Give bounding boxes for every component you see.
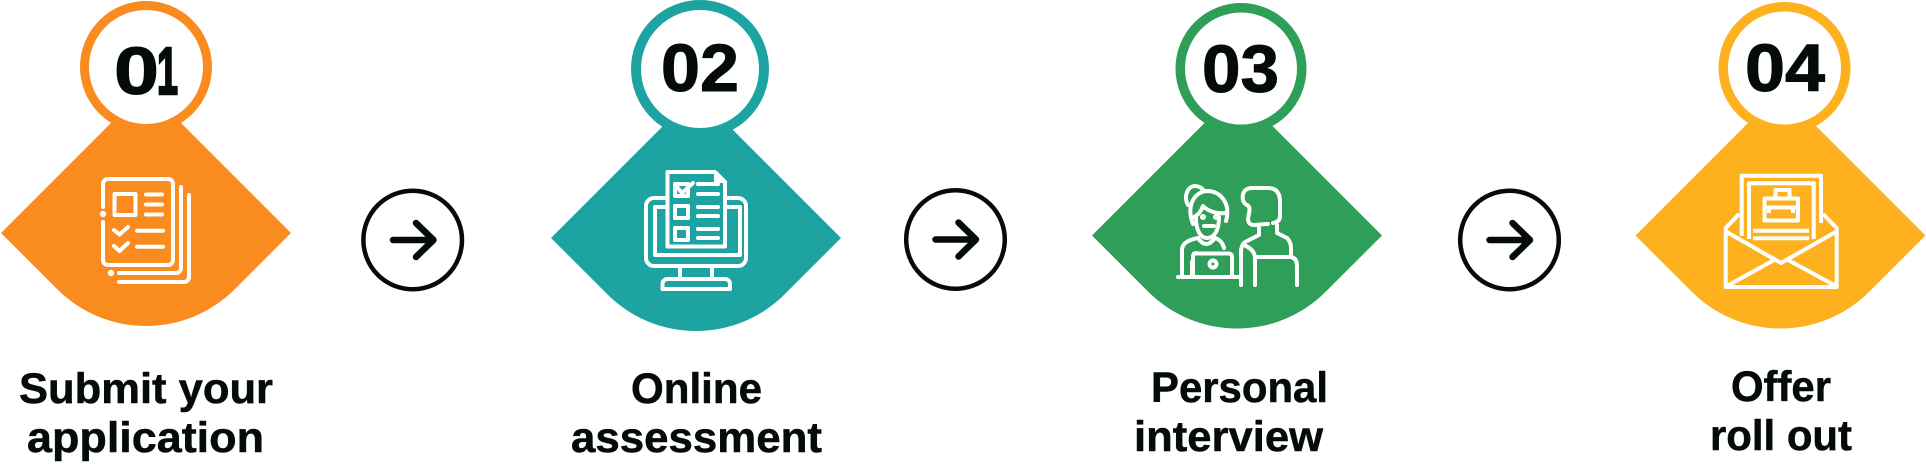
number badge 04 xyxy=(1723,7,1846,129)
icon: online test on monitor xyxy=(646,172,746,289)
number badge 01 xyxy=(84,6,208,128)
number badge 02 xyxy=(636,5,764,133)
number badge 01: 1 xyxy=(157,34,178,109)
step label: Offer xyxy=(1731,363,1831,411)
step label xyxy=(571,365,822,462)
green diamond panel xyxy=(1092,90,1382,329)
step label: Online xyxy=(631,365,762,413)
number badge 03 xyxy=(1180,8,1302,129)
step label: Submit your xyxy=(19,365,273,413)
step label: interview xyxy=(1134,413,1324,461)
yellow diamond panel xyxy=(1636,90,1926,329)
step 4: offer roll out xyxy=(1636,7,1926,460)
orange diamond panel xyxy=(1,88,291,326)
step label: roll out xyxy=(1710,412,1852,460)
step label xyxy=(1710,363,1852,460)
number badge 03: 03 xyxy=(1202,32,1279,107)
step 2: online assessment xyxy=(551,5,841,462)
arrow 2 xyxy=(906,190,1005,289)
icon: two people in an interview xyxy=(1178,186,1297,285)
step 3: personal interview xyxy=(1092,8,1382,461)
arrow 3 xyxy=(1460,191,1559,289)
step label xyxy=(19,365,273,462)
step label: application xyxy=(27,414,264,462)
teal diamond panel xyxy=(551,93,841,331)
number badge 04: 04 xyxy=(1745,31,1825,106)
step label: Personal xyxy=(1151,364,1328,412)
number badge 01: 0 xyxy=(114,34,159,109)
step label: assessment xyxy=(571,414,822,462)
arrow 1 xyxy=(363,191,462,289)
icon: offer letter in envelope xyxy=(1726,176,1837,287)
step 1: submit your application xyxy=(1,6,291,462)
icon: application documents xyxy=(102,179,189,282)
number badge 02: 02 xyxy=(661,31,739,106)
step label xyxy=(1134,364,1328,461)
